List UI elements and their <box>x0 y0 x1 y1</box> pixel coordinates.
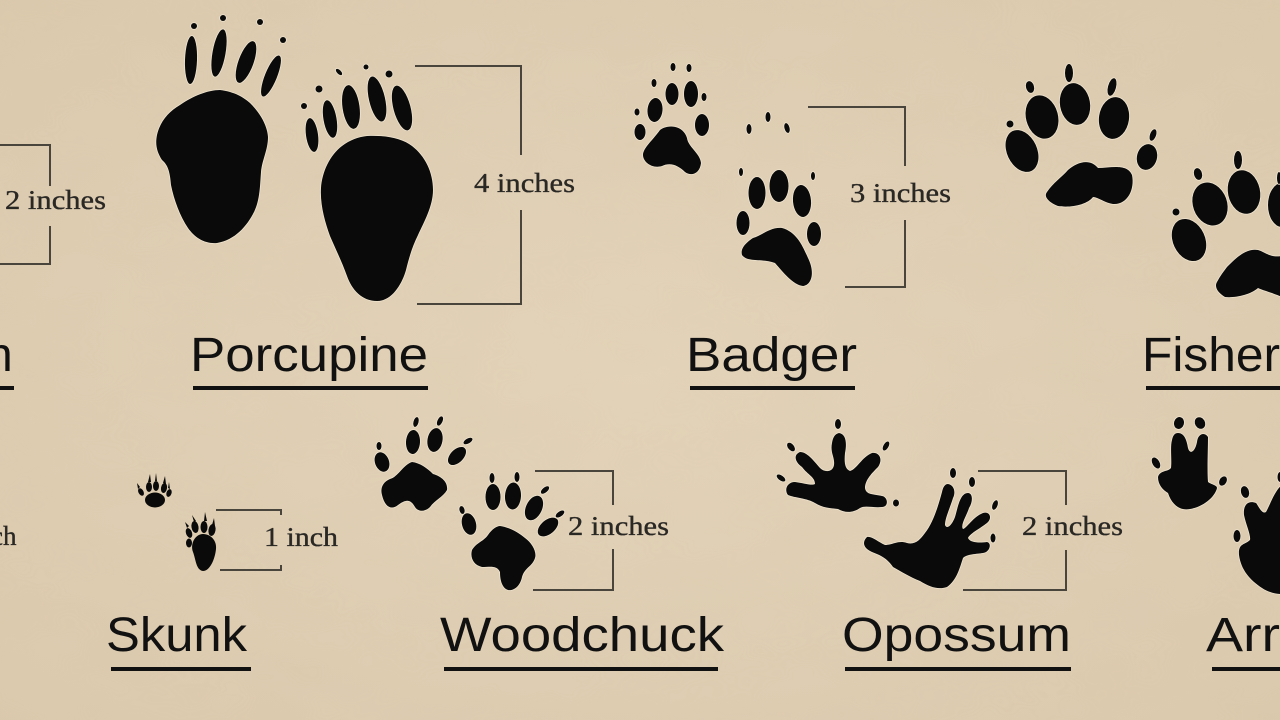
heading: Woodchuck: Woodchuck <box>440 609 725 662</box>
heading: Opossum: Opossum <box>842 609 1071 662</box>
icon: armadillo hind track <box>1234 472 1280 594</box>
panel: porcupine <box>156 15 575 390</box>
heading: Armadillo cropped: Arr <box>1206 609 1280 662</box>
size bracket: 2 inches <box>963 471 1123 590</box>
size bracket: 2 inches <box>533 471 669 590</box>
icon: woodchuck front track <box>372 415 474 511</box>
icon: fisher hind track <box>1165 151 1280 297</box>
heading underline <box>193 386 428 390</box>
panel: skunk <box>106 473 339 671</box>
size bracket: 3 inches <box>808 107 951 287</box>
icon: skunk front track <box>137 473 173 508</box>
icon: skunk hind track <box>184 512 216 571</box>
heading underline <box>1212 667 1280 671</box>
heading underline <box>111 667 251 671</box>
panel: raccoon fragment <box>0 145 106 390</box>
heading: Porcupine: Porcupine <box>190 329 428 382</box>
heading: Badger: Badger <box>686 329 857 382</box>
icon: opossum hind track <box>864 468 999 588</box>
panel: armadillo fragment <box>1150 415 1280 671</box>
size bracket: 1 inch: 1 inch <box>264 522 339 552</box>
heading underline <box>1146 386 1280 390</box>
size bracket: 2 inches: 2 inches <box>5 185 106 215</box>
heading underline <box>690 386 855 390</box>
size bracket: 2 inches <box>0 145 106 264</box>
icon: porcupine hind track <box>301 64 433 301</box>
panel: woodchuck <box>372 415 725 671</box>
heading underline <box>845 667 1071 671</box>
icon: fisher front track <box>999 64 1160 207</box>
icon: porcupine front track <box>156 15 286 243</box>
size bracket: 4 inches: 4 inches <box>474 168 575 198</box>
size bracket: 2 inches: 2 inches <box>568 511 669 541</box>
icon: badger hind track <box>736 112 821 286</box>
panel: badger <box>634 63 951 390</box>
icon: woodchuck hind track <box>459 472 566 590</box>
panel: opossum <box>775 419 1123 671</box>
heading underline <box>0 386 14 390</box>
size bracket: 1 inch <box>216 510 339 570</box>
icon: armadillo front track <box>1150 415 1229 509</box>
size bracket: 2 inches: 2 inches <box>1022 511 1123 541</box>
size bracket: 3 inches: 3 inches <box>850 178 951 208</box>
heading underline <box>444 667 718 671</box>
size bracket: 4 inches <box>415 66 575 304</box>
icon: badger front track <box>634 63 709 174</box>
icon: opossum front track <box>775 419 899 512</box>
panel: fisher <box>999 64 1280 390</box>
heading: Skunk: Skunk <box>106 609 248 662</box>
heading: Fisher: Fisher <box>1142 329 1280 382</box>
